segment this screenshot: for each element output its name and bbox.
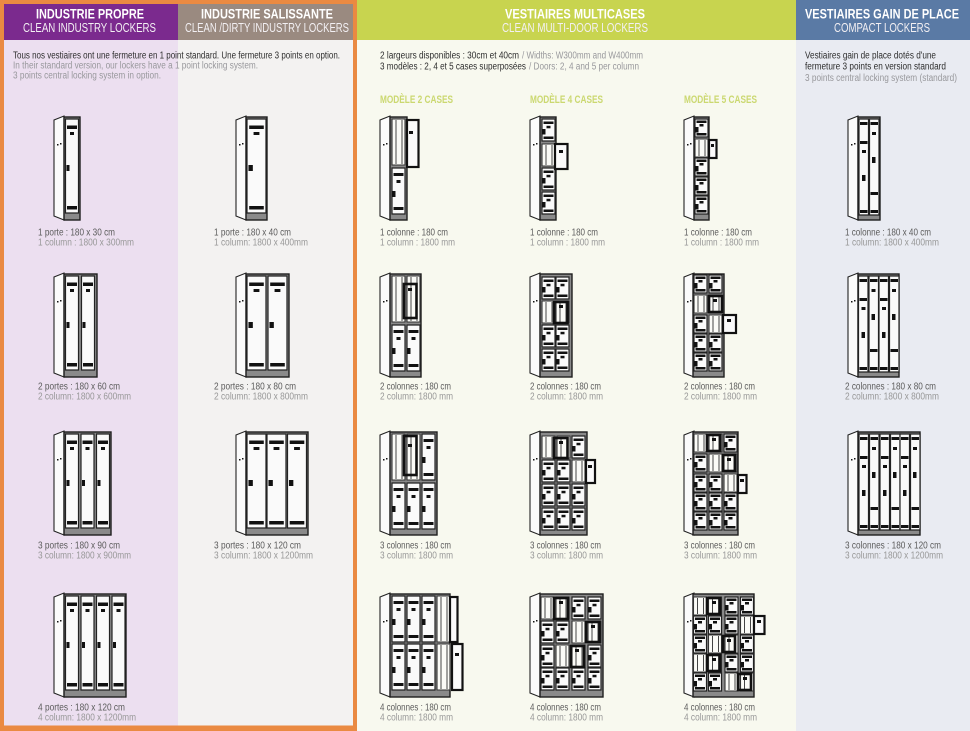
locker: 4 doors 120 cm (54, 593, 126, 697)
header: industrie propre: CLEAN INDUSTRY LOCKERS (23, 20, 156, 35)
intro text: industry lockers: Tous nos vestiaires ont une fermeture en 1 point standard. Une fermeture 3 points en option. (13, 50, 340, 62)
locker: 2 doors 60 cm (54, 273, 97, 377)
header: vestiaires multicases (357, 0, 796, 40)
locker: 1 door 30 cm (54, 116, 80, 220)
locker: 2 cases, 1 column (380, 116, 418, 220)
label: 2 cases 1 column (380, 228, 455, 248)
intro text: multi-door lockers: / Widths: W300mm and W400mm (522, 50, 643, 62)
panel: compact lockers (796, 0, 970, 731)
label: 5 cases 4 columns: 4 column: 1800 mm (684, 712, 757, 724)
label: 4 cases 1 column: 1 column : 1800 mm (530, 238, 605, 248)
label: compact 3 columns: 3 colonnes : 180 x 120 cm (845, 540, 941, 552)
locker: 2 cases, 2 columns (380, 273, 421, 377)
label: 5 cases 1 column: 1 column : 1800 mm (684, 238, 759, 248)
label: 1 porte 30 (38, 228, 134, 248)
locker: 4 cases, 3 columns (530, 431, 595, 535)
label: compact 1 column: 1 colonne : 180 x 40 cm (845, 228, 931, 238)
label: 2 portes 80 (214, 382, 308, 402)
model headings: MODÈLE 5 CASES (684, 93, 757, 106)
label: 5 cases 1 column (684, 228, 759, 248)
header: vestiaires multicases: VESTIAIRES MULTICASES (505, 6, 645, 22)
panel: multi-door lockers (357, 0, 796, 731)
locker: 3 doors 120 cm (236, 431, 308, 535)
label: 2 portes 60: 2 column: 1800 x 600mm (38, 392, 131, 402)
locker: compact 2 columns (848, 273, 899, 377)
label: 5 cases 2 columns: 2 colonnes : 180 cm (684, 382, 755, 392)
label: 5 cases 4 columns (684, 702, 757, 724)
locker: 4 cases, 1 column (530, 116, 568, 220)
label: 4 cases 2 columns (530, 382, 603, 402)
panel: clean dirty industry lockers (178, 4, 353, 726)
label: 2 cases 4 columns: 4 column: 1800 mm (380, 712, 453, 724)
orange outline around industry panels (0, 0, 357, 731)
intro text: industry lockers: In their standard version, our lockers have a 1 point locking system. (13, 60, 258, 72)
label: 3 portes 120 (214, 540, 313, 562)
header: industrie propre (4, 4, 178, 40)
label: 5 cases 2 columns: 2 column: 1800 mm (684, 392, 757, 402)
label: 2 portes 60: 2 portes : 180 x 60 cm (38, 382, 120, 392)
label: 3 portes 120: 3 column: 1800 x 1200mm (214, 550, 313, 562)
label: 2 portes 60 (38, 382, 131, 402)
label: 4 cases 4 columns (530, 702, 603, 724)
locker: 5 cases, 2 columns (684, 273, 736, 377)
header: vestiaires multicases: CLEAN MULTI-DOOR LOCKERS (502, 20, 648, 35)
label: 4 cases 4 columns: 4 colonnes : 180 cm (530, 702, 601, 714)
label: 2 cases 1 column: 1 colonne : 180 cm (380, 228, 448, 238)
label: 1 porte 40: 1 porte : 180 x 40 cm (214, 228, 291, 238)
label: 2 cases 3 columns: 3 colonnes : 180 cm (380, 540, 451, 552)
header: industrie propre: INDUSTRIE PROPRE (36, 6, 144, 22)
label: 3 portes 90: 3 portes : 180 x 90 cm (38, 540, 120, 552)
label: compact 2 columns (845, 382, 939, 402)
locker: 2 doors 80 cm (236, 273, 289, 377)
header: industrie salissante: CLEAN /DIRTY INDUSTRY LOCKERS (185, 20, 349, 35)
label: 4 cases 3 columns (530, 540, 603, 562)
label: 5 cases 2 columns (684, 382, 757, 402)
label: 5 cases 3 columns: 3 column: 1800 mm (684, 550, 757, 562)
header: vestiaires gain de place: COMPACT LOCKERS (834, 20, 930, 35)
label: 5 cases 4 columns: 4 colonnes : 180 cm (684, 702, 755, 714)
locker: 4 cases, 4 columns (530, 593, 603, 697)
model headings: MODÈLE 4 CASES (530, 93, 603, 106)
header: industrie salissante (178, 4, 353, 40)
intro text: industry lockers (13, 50, 340, 82)
locker: 5 cases, 3 columns (684, 431, 746, 535)
label: 5 cases 3 columns (684, 540, 757, 562)
label: 1 porte 40 (214, 228, 308, 248)
locker: 3 doors 90 cm (54, 431, 111, 535)
label: 4 portes 120 (38, 702, 136, 724)
label: 2 cases 4 columns (380, 702, 453, 724)
header: industrie salissante: INDUSTRIE SALISSANTE (201, 6, 333, 22)
label: 2 cases 3 columns (380, 540, 453, 562)
label: compact 2 columns: 2 column: 1800 x 800mm (845, 392, 939, 402)
label: 2 cases 2 columns: 2 colonnes : 180 cm (380, 382, 451, 392)
label: 3 portes 120: 3 portes : 180 x 120 cm (214, 540, 301, 552)
label: 4 portes 120: 4 portes : 180 x 120 cm (38, 702, 125, 714)
model headings (380, 93, 757, 106)
label: 4 cases 3 columns: 3 colonnes : 180 cm (530, 540, 601, 552)
label: 2 cases 1 column: 1 column : 1800 mm (380, 238, 455, 248)
label: 4 cases 2 columns: 2 column: 1800 mm (530, 392, 603, 402)
label: 3 portes 90 (38, 540, 131, 562)
label: 2 cases 3 columns: 3 column: 1800 mm (380, 550, 453, 562)
label: 2 portes 80: 2 column: 1800 x 800mm (214, 392, 308, 402)
label: 4 cases 1 column (530, 228, 605, 248)
label: 1 porte 30: 1 porte : 180 x 30 cm (38, 228, 115, 238)
label: compact 2 columns: 2 colonnes : 180 x 80 cm (845, 382, 936, 392)
model headings: MODÈLE 2 CASES (380, 93, 453, 106)
label: 2 cases 2 columns: 2 column: 1800 mm (380, 392, 453, 402)
locker: 5 cases, 4 columns (684, 593, 764, 697)
header: vestiaires gain de place (796, 0, 970, 40)
panel: clean industry lockers (4, 4, 178, 726)
intro text: multi-door lockers: 3 modèles : 2, 4 et 5 cases superposées (380, 62, 526, 72)
locker: 4 cases, 2 columns (530, 273, 572, 377)
intro text: multi-door lockers: / Doors: 2, 4 and 5 per column (529, 62, 639, 72)
locker: 2 cases, 3 columns (380, 431, 437, 535)
label: 5 cases 3 columns: 3 colonnes : 180 cm (684, 540, 755, 552)
label: 5 cases 1 column: 1 colonne : 180 cm (684, 228, 752, 238)
label: compact 3 columns (845, 540, 943, 562)
label: 3 portes 90: 3 column: 1800 x 900mm (38, 550, 131, 562)
label: 1 porte 30: 1 column : 1800 x 300mm (38, 238, 134, 248)
locker: 5 cases, 1 column (684, 116, 716, 220)
intro text: multi-door lockers (380, 50, 643, 72)
intro text: compact lockers: Vestiaires gain de place dotés d'une (805, 50, 936, 62)
intro text: industry lockers: 3 points central locking system in option. (13, 70, 161, 82)
label: 1 porte 40: 1 column: 1800 x 400mm (214, 238, 308, 248)
locker: compact 1 column (848, 116, 880, 220)
label: 4 portes 120: 4 column: 1800 x 1200mm (38, 712, 136, 724)
locker: compact 3 columns (848, 431, 920, 535)
label: 4 cases 1 column: 1 colonne : 180 cm (530, 228, 598, 238)
label: 4 cases 3 columns: 3 column: 1800 mm (530, 550, 603, 562)
label: 2 cases 4 columns: 4 colonnes : 180 cm (380, 702, 451, 714)
label: compact 1 column (845, 228, 939, 248)
label: 2 cases 2 columns (380, 382, 453, 402)
locker: 2 cases, 4 columns (380, 593, 462, 697)
locker: 1 door 40 cm (236, 116, 267, 220)
label: 4 cases 4 columns: 4 column: 1800 mm (530, 712, 603, 724)
intro text: compact lockers (805, 50, 957, 84)
label: compact 1 column: 1 column: 1800 x 400mm (845, 238, 939, 248)
label: compact 3 columns: 3 column: 1800 x 1200mm (845, 550, 943, 562)
label: 2 portes 80: 2 portes : 180 x 80 cm (214, 382, 296, 392)
label: 4 cases 2 columns: 2 colonnes : 180 cm (530, 382, 601, 392)
intro text: multi-door lockers: 2 largeurs disponibles : 30cm et 40cm (380, 50, 519, 62)
